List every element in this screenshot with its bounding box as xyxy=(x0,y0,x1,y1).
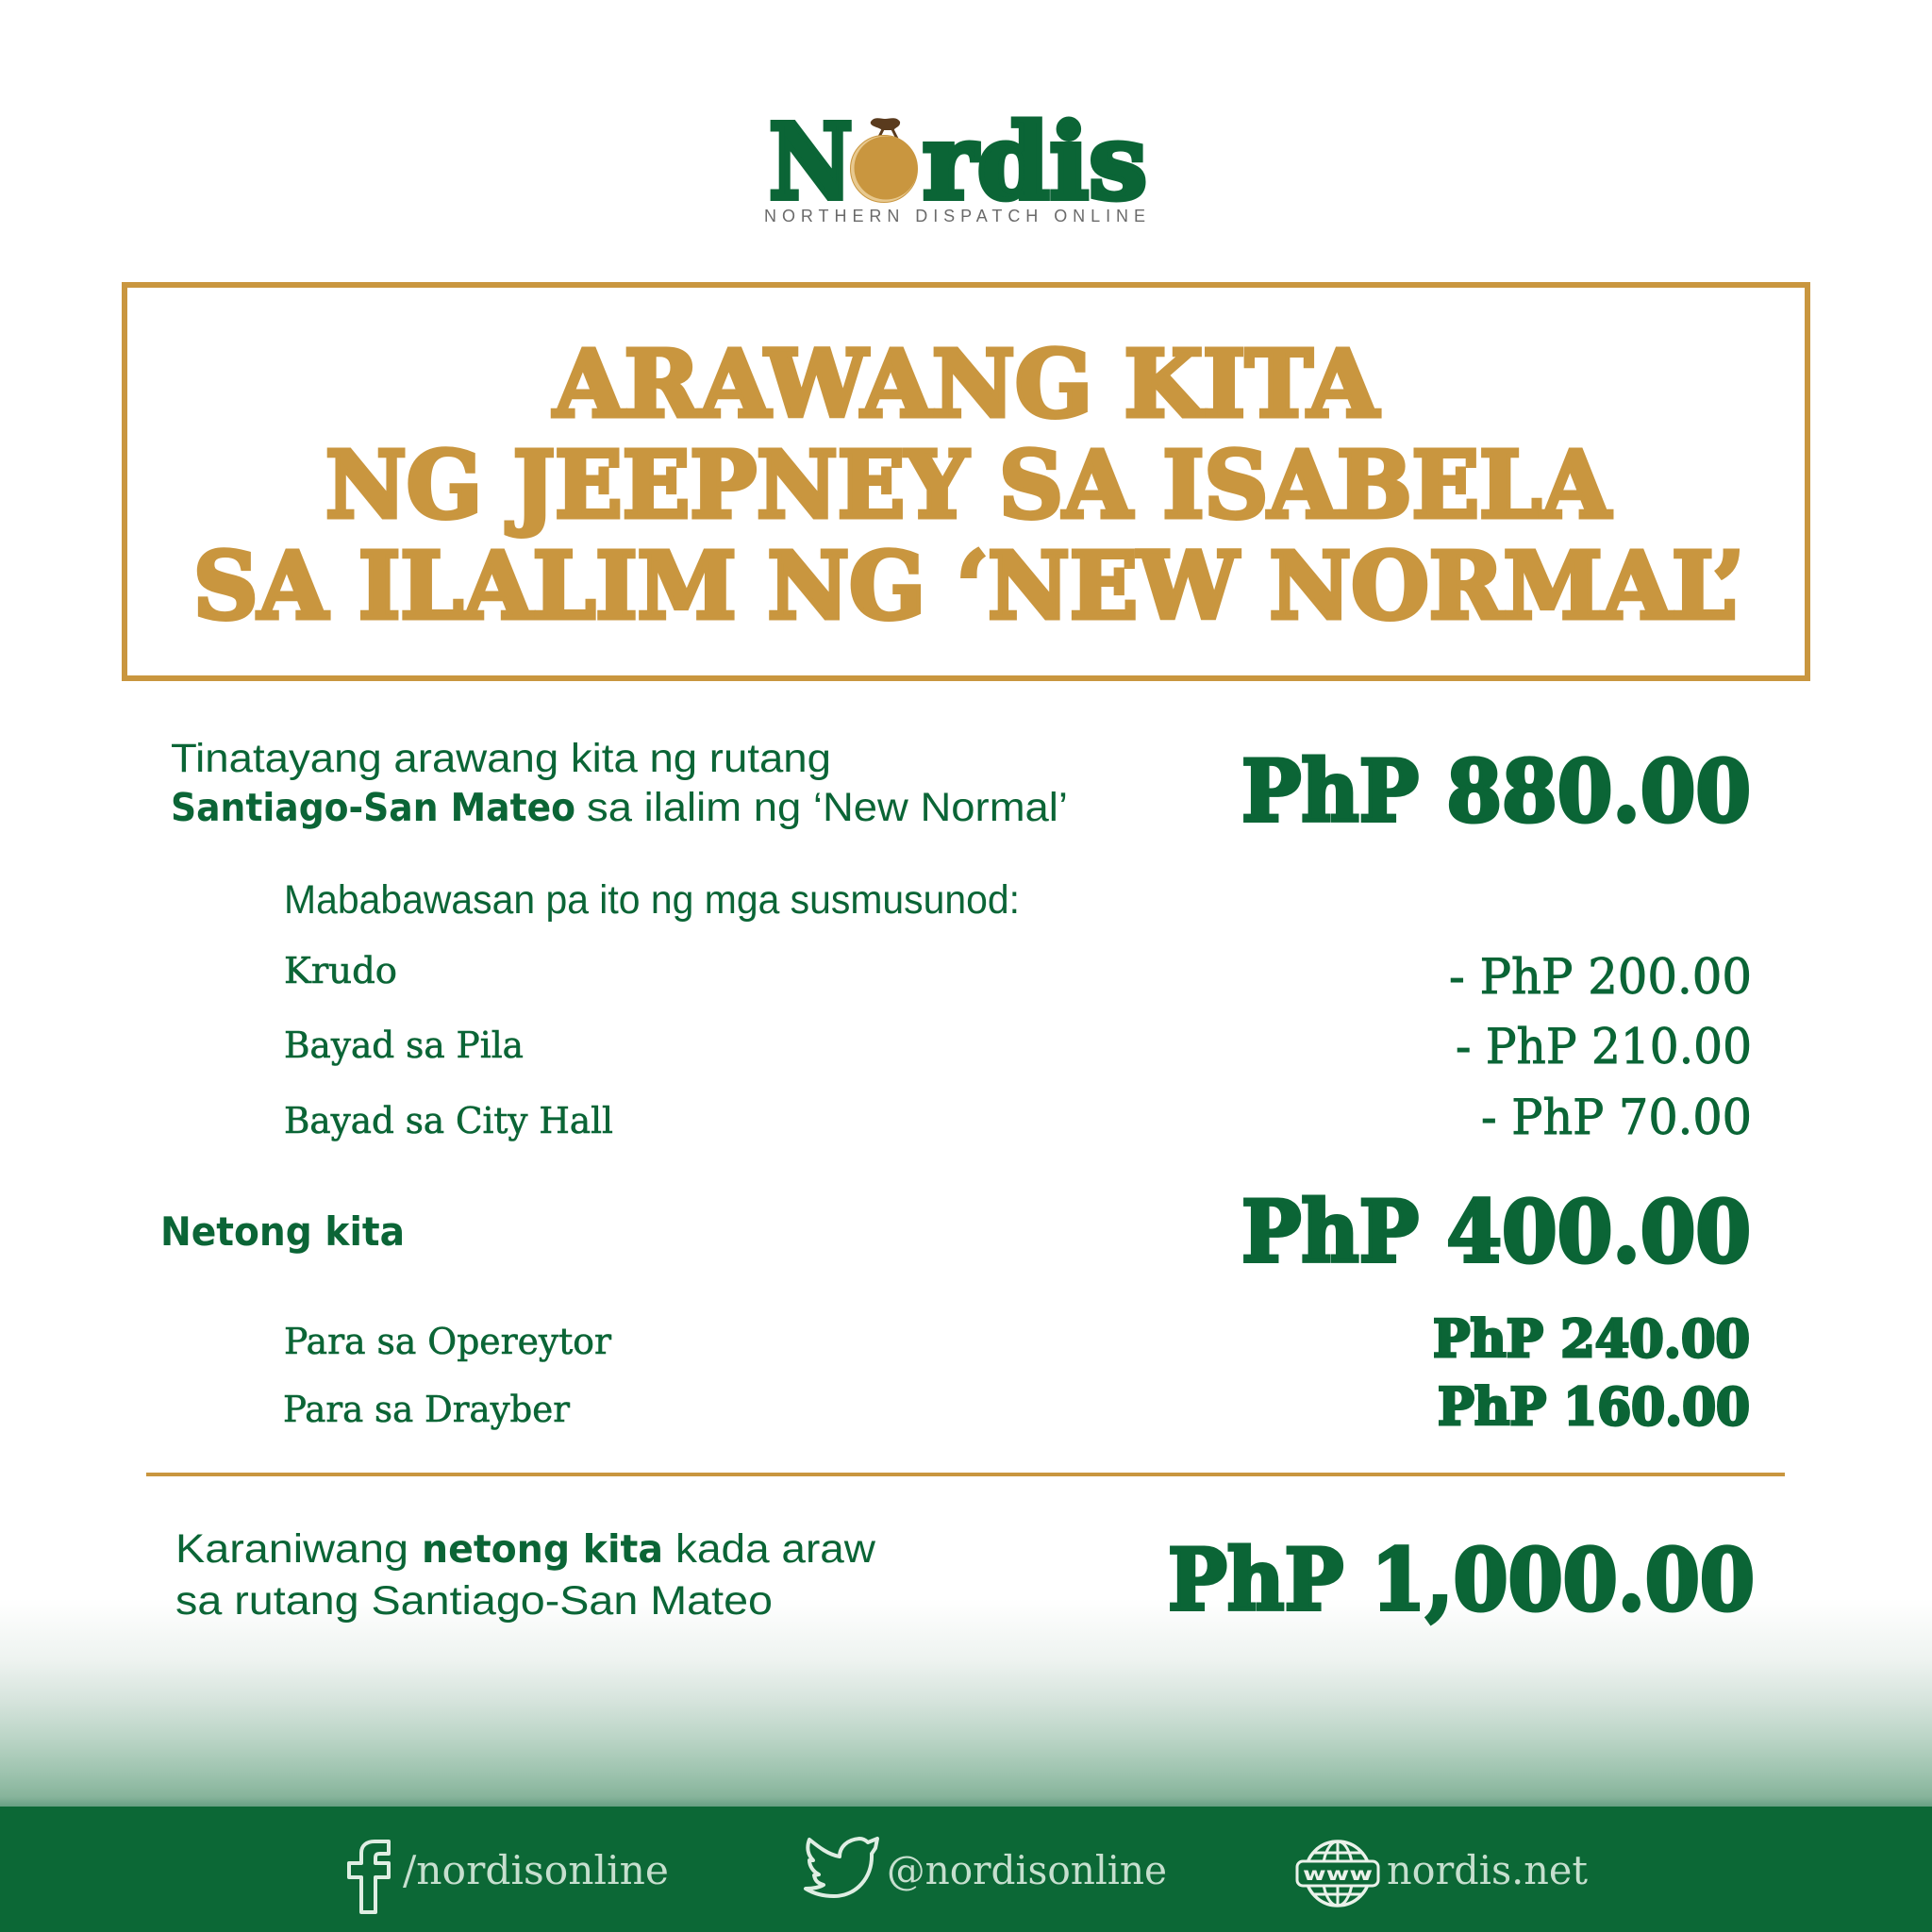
logo tagline: NORTHERN DISPATCH ONLINE xyxy=(764,207,1145,225)
amount Krudo: - PhP 200.00 xyxy=(1449,950,1752,1006)
icon: facebook xyxy=(349,1841,389,1912)
net income block xyxy=(160,1182,1751,1437)
title line 1: ARAWANG KITA xyxy=(553,330,1380,438)
title line 3: SA ILALIM NG ‘NEW NORMAL’ xyxy=(193,532,1744,640)
footer social links xyxy=(349,1839,1588,1912)
net income amount: PhP 400.00 xyxy=(1241,1182,1751,1282)
deductions intro: Mababawasan pa ito ng mga susmusunod: xyxy=(284,877,1020,923)
logo letter N: N xyxy=(769,101,853,223)
average net income block xyxy=(175,1526,1755,1630)
background fade xyxy=(0,1599,1932,1809)
estimate description line 1: Tinatayang arawang kita ng rutang xyxy=(171,736,831,781)
amount operator: PhP 240.00 xyxy=(1433,1308,1750,1369)
amount driver: PhP 160.00 xyxy=(1438,1376,1750,1437)
average description end: kada araw xyxy=(675,1526,876,1572)
estimate description bold route: Santiago-San Mateo xyxy=(171,785,575,830)
label operator: Para sa Opereytor xyxy=(284,1321,612,1362)
title border xyxy=(125,285,1807,678)
average description start: Karaniwang xyxy=(175,1526,408,1572)
deductions block xyxy=(284,877,1752,1146)
label Bayad sa City Hall: Bayad sa City Hall xyxy=(284,1100,613,1141)
average amount: PhP 1,000.00 xyxy=(1168,1530,1755,1630)
average description line 2: sa rutang Santiago-San Mateo xyxy=(175,1578,773,1624)
website: nordis.net xyxy=(1387,1847,1588,1893)
twitter handle: @nordisonline xyxy=(887,1847,1167,1893)
title line 2: NG JEEPNEY SA ISABELA xyxy=(325,431,1612,539)
estimate block xyxy=(171,736,1751,841)
title panel xyxy=(125,285,1807,678)
estimate amount: PhP 880.00 xyxy=(1241,741,1751,841)
logo: Nordis xyxy=(764,101,1147,225)
logo letters rdis: rdis xyxy=(923,101,1147,223)
label Krudo: Krudo xyxy=(284,950,397,991)
icon: twitter xyxy=(806,1839,877,1896)
icon: globe www: www xyxy=(1303,1864,1373,1885)
icon: coin bag xyxy=(851,118,917,202)
footer band xyxy=(0,1807,1932,1932)
icon: globe www xyxy=(1297,1841,1378,1906)
amount City Hall: - PhP 70.00 xyxy=(1481,1091,1752,1146)
estimate description line 2: sa ilalim ng ‘New Normal’ xyxy=(587,785,1068,830)
facebook handle: /nordisonline xyxy=(403,1847,669,1893)
amount Pila: - PhP 210.00 xyxy=(1456,1020,1752,1075)
average description bold: netong kita xyxy=(422,1526,663,1572)
label Bayad sa Pila: Bayad sa Pila xyxy=(284,1024,524,1066)
label driver: Para sa Drayber xyxy=(283,1389,571,1430)
net income label: Netong kita xyxy=(160,1208,405,1255)
